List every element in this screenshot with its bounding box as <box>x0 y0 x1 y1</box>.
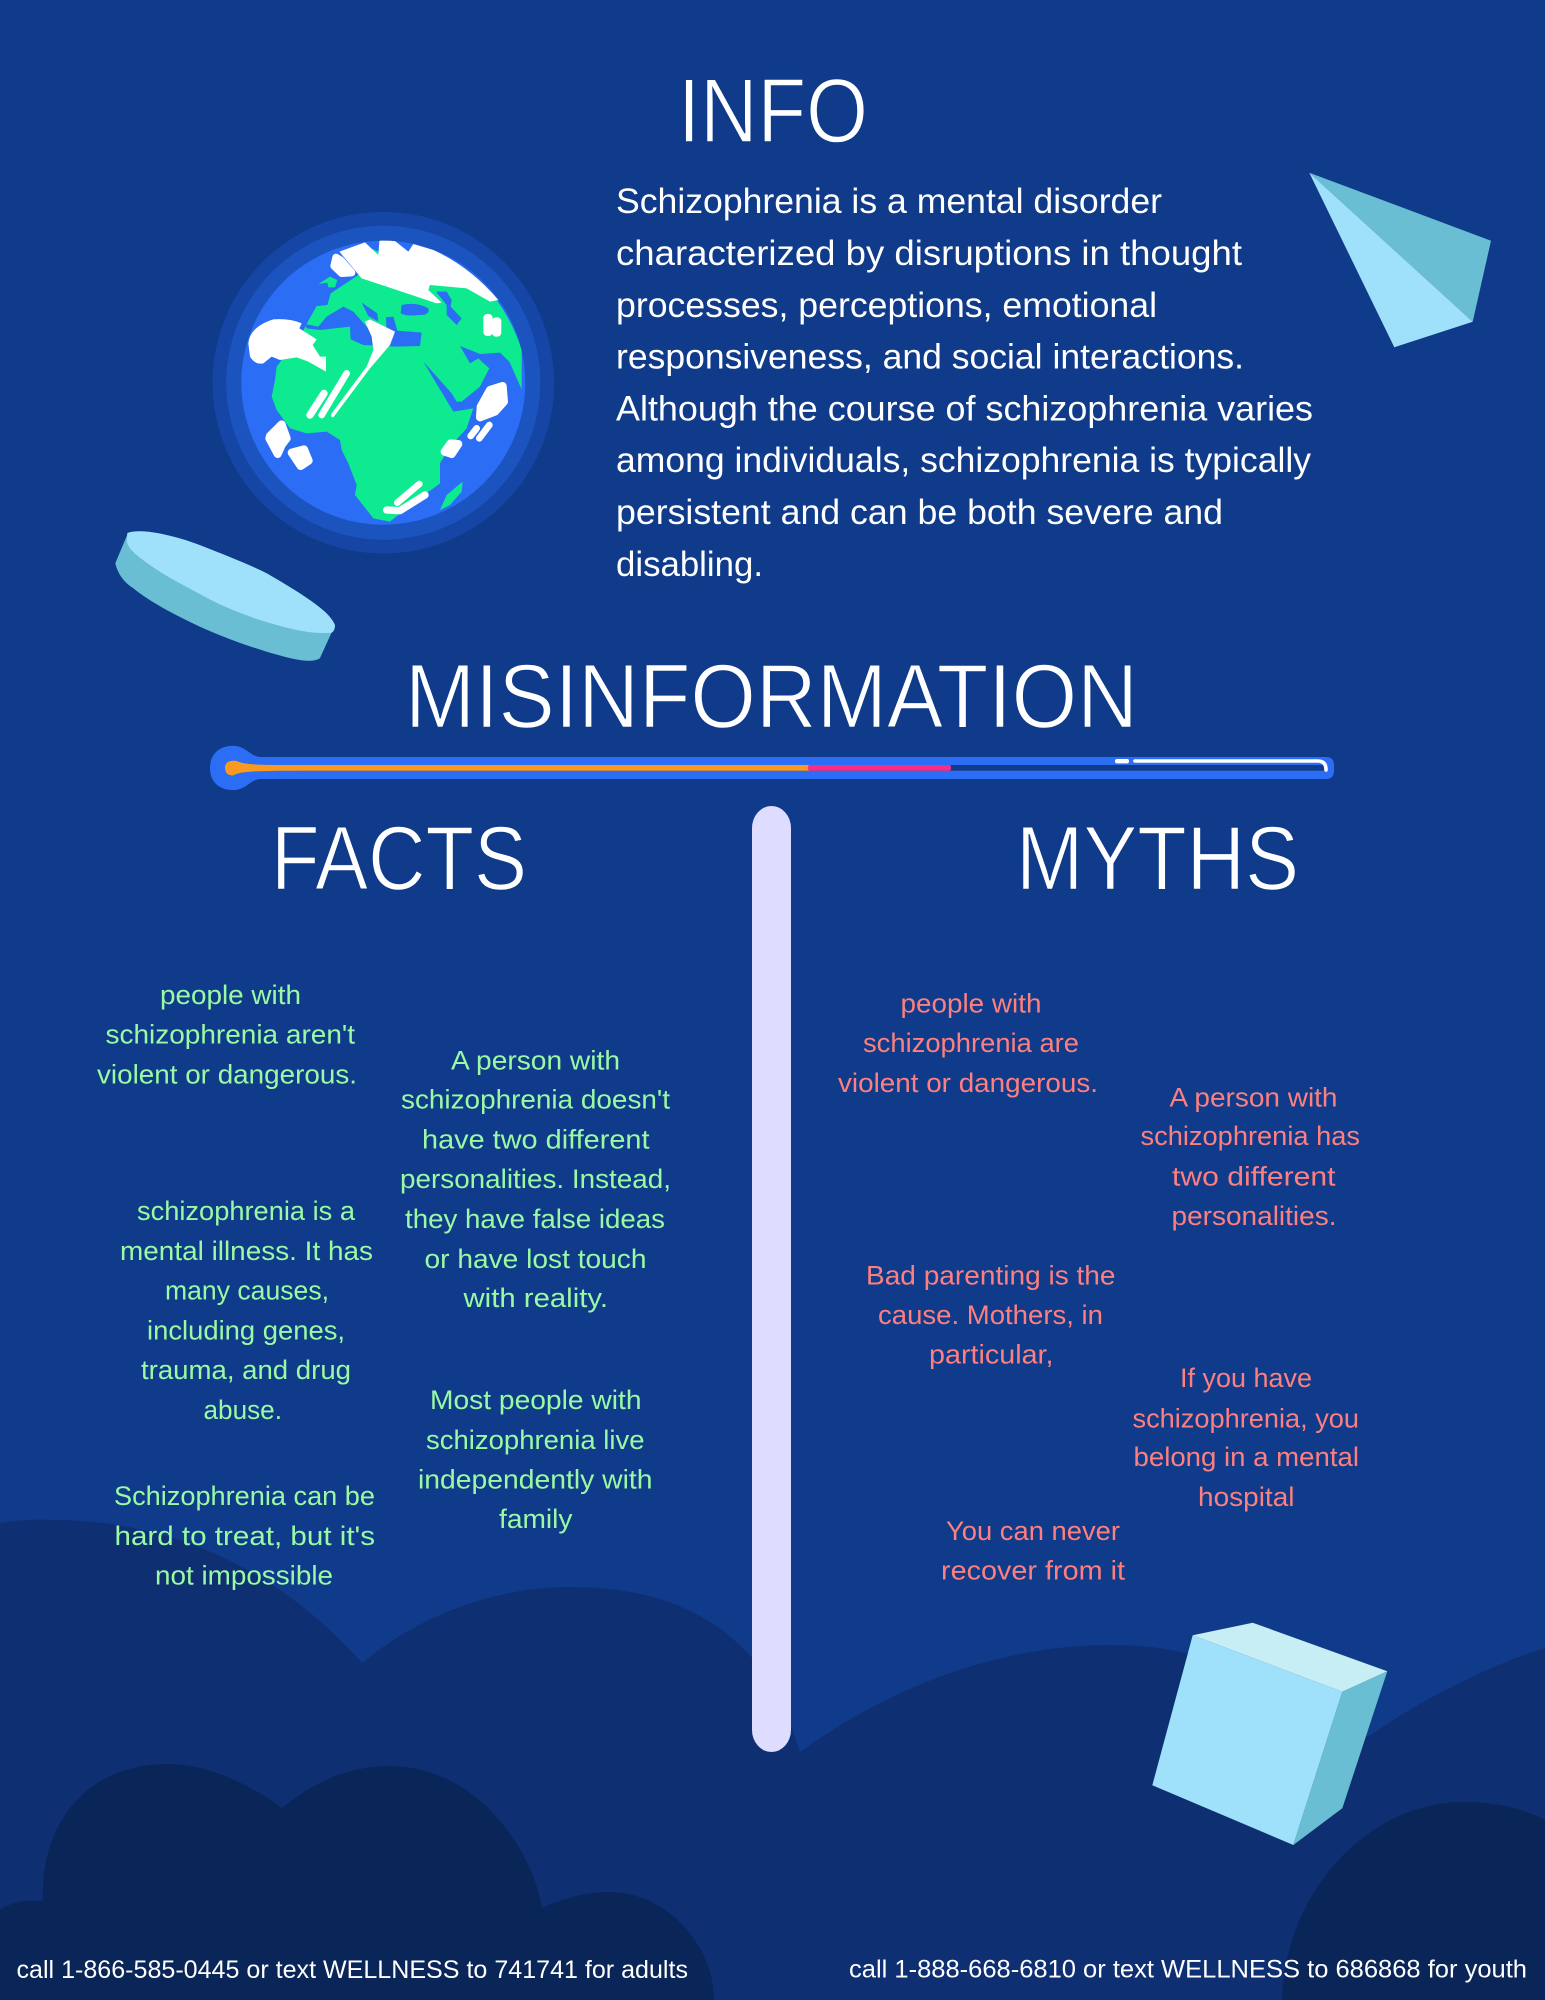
heading: FACTS: FACTS <box>271 808 527 909</box>
fact: live independently: Most people with <box>430 1385 642 1415</box>
info paragraph: disabling. <box>616 545 763 584</box>
fact: not violent: people with <box>160 980 301 1010</box>
myth: violent: schizophrenia are <box>863 1028 1079 1058</box>
myth: bad parenting <box>866 1260 1116 1369</box>
fact: not two personalities: have two different <box>422 1125 650 1155</box>
fact: not two personalities: or have lost touch <box>424 1244 646 1274</box>
myth: never recover: You can never <box>946 1516 1120 1546</box>
myth: violent: people with <box>900 988 1042 1018</box>
info paragraph: processes, perceptions, emotional <box>616 286 1157 325</box>
heading: INFO: INFO <box>678 61 868 162</box>
myth: mental hospital: If you have <box>1180 1363 1312 1393</box>
myth: two personalities: A person with <box>1170 1082 1338 1112</box>
fact: live independently: independently with <box>418 1465 652 1495</box>
center divider bar <box>752 806 791 1752</box>
heading: MYTHS: MYTHS <box>1016 808 1299 909</box>
fact: not violent: violent or dangerous. <box>97 1060 357 1090</box>
myth: violent: violent or dangerous. <box>838 1068 1098 1098</box>
info paragraph: responsiveness, and social interactions. <box>616 338 1244 377</box>
myth: two personalities: schizophrenia has <box>1140 1121 1360 1151</box>
myth: bad parenting: Bad parenting is the <box>866 1260 1116 1290</box>
info paragraph: among individuals, schizophrenia is typically <box>616 441 1312 480</box>
heading: MISINFORMATION: MISINFORMATION <box>405 647 1138 748</box>
fact: not two personalities: A person with <box>451 1045 620 1075</box>
icon: globe <box>212 212 554 553</box>
info paragraph: persistent and can be both severe and <box>616 493 1223 532</box>
icon: paper plane <box>1309 173 1491 347</box>
fact: mental illness causes <box>120 1196 373 1425</box>
fact: not two personalities: personalities. Instead, <box>400 1164 671 1194</box>
fact: treatable <box>114 1481 375 1590</box>
myth: never recover <box>941 1516 1126 1586</box>
fact: mental illness causes: many causes, <box>165 1276 329 1306</box>
myth: bad parenting: particular, <box>929 1339 1054 1369</box>
myth: mental hospital <box>1132 1363 1359 1512</box>
icon: thermometer divider <box>210 746 1334 790</box>
fact: mental illness causes: including genes, <box>147 1316 345 1346</box>
fact: treatable: not impossible <box>155 1560 333 1590</box>
fact: treatable: hard to treat, but it's <box>114 1521 375 1551</box>
fact: mental illness causes: abuse. <box>204 1395 282 1425</box>
fact: treatable: Schizophrenia can be <box>114 1481 375 1511</box>
icon: pill <box>115 531 335 661</box>
myth: mental hospital: schizophrenia, you <box>1132 1404 1359 1434</box>
myth: two personalities: two different <box>1172 1162 1336 1192</box>
myth: violent <box>838 988 1098 1098</box>
fact: live independently <box>418 1385 652 1534</box>
fact: mental illness causes: schizophrenia is a <box>137 1196 355 1226</box>
fact: not two personalities <box>400 1045 671 1313</box>
info paragraph <box>616 182 1313 584</box>
fact: live independently: schizophrenia live <box>426 1425 644 1455</box>
info paragraph: Schizophrenia is a mental disorder <box>616 182 1162 221</box>
fact: not two personalities: with reality. <box>462 1283 608 1313</box>
myth: mental hospital: hospital <box>1198 1482 1294 1512</box>
myth: mental hospital: belong in a mental <box>1134 1442 1359 1472</box>
background hills: mid layer <box>0 1520 1545 2000</box>
myth: never recover: recover from it <box>941 1556 1126 1586</box>
myth: two personalities <box>1140 1082 1360 1231</box>
myth: bad parenting: cause. Mothers, in <box>878 1300 1103 1330</box>
icon: cube <box>1152 1623 1387 1845</box>
info paragraph: characterized by disruptions in thought <box>616 234 1242 273</box>
fact: not two personalities: they have false ideas <box>405 1204 665 1234</box>
footer: youth hotline: call 1-888-668-6810 or text WELLNESS to 686868 for youth <box>849 1956 1527 1984</box>
fact: not violent: schizophrenia aren't <box>106 1020 356 1050</box>
info paragraph: Although the course of schizophrenia varies <box>616 389 1313 428</box>
footer: adults hotline: call 1-866-585-0445 or text WELLNESS to 741741 for adults <box>16 1956 688 1984</box>
myth: two personalities: personalities. <box>1172 1201 1336 1231</box>
fact: mental illness causes: trauma, and drug <box>141 1355 351 1385</box>
fact: live independently: family <box>499 1504 573 1534</box>
fact: mental illness causes: mental illness. It has <box>120 1236 373 1266</box>
fact: not violent <box>97 980 357 1090</box>
background hills: dark left <box>0 1764 714 2000</box>
background hills: dark right <box>1282 1802 1545 2000</box>
fact: not two personalities: schizophrenia doesn't <box>401 1084 671 1114</box>
